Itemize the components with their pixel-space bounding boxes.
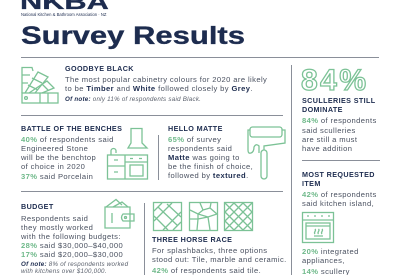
panel: sculleries: are still a must [302, 135, 357, 144]
heading: BUDGET [21, 202, 54, 211]
panel: budget [21, 198, 135, 275]
panel: battle of the benches [21, 124, 148, 181]
heading: MOST REQUESTED [302, 170, 375, 179]
panel: sculleries [301, 64, 377, 153]
body text: For splashbacks, three options [152, 246, 267, 255]
icon: paint roller [247, 126, 286, 180]
logo [20, 0, 109, 17]
heading: BATTLE OF THE BENCHES [21, 124, 122, 133]
icon: oven [302, 212, 334, 244]
icon: herringbone tile [152, 202, 182, 232]
panel: battle of the benches: will be the benchtop [21, 153, 96, 162]
panel: battle of the benches: Engineered Stone [21, 144, 88, 153]
icon: colour swatch fan [21, 66, 59, 104]
panel: hello matte: followed by textured. [168, 171, 249, 180]
panel: sculleries: have addition [302, 144, 352, 153]
body text: 65% of survey [168, 135, 221, 144]
panel: budget: they mostly worked [21, 223, 93, 232]
panel: most requested item: appliances, [302, 256, 345, 265]
note: Of note: 8% of respondents worked [21, 261, 128, 268]
body text: 20% integrated [302, 247, 359, 256]
panel: most requested item: said kitchen island, [302, 199, 374, 208]
panel: sculleries: DOMINATE [302, 105, 343, 114]
heading: GOODBYE BLACK [65, 64, 134, 73]
panel: hello matte: respondents said [168, 144, 232, 153]
icon: lattice tile [224, 202, 254, 232]
body text: The most popular cabinetry colours for 2020 are likely [65, 75, 267, 84]
panel: three horse race: 42% of respondents said tile. [152, 266, 261, 275]
heading: SCULLERIES STILL [302, 96, 376, 105]
panel: budget: with the following budgets: [21, 232, 121, 241]
heading: THREE HORSE RACE [152, 235, 232, 244]
panel: battle of the benches: 37% said Porcelain [21, 172, 93, 181]
body text: Respondents said [21, 214, 88, 223]
panel: goodbye black: to be Timber and White followed closely by Grey. [65, 84, 253, 93]
logo tagline: National Kitchen & Bathroom Association · NZ [21, 12, 106, 17]
panel: battle of the benches: of choice in 2020 [21, 162, 85, 171]
panel: budget: 28% said $30,000–$40,000 [21, 241, 123, 250]
panel: budget: with kitchens over $100,000. [21, 268, 107, 275]
body text: 40% of respondents said [21, 135, 114, 144]
panel: sculleries: said sculleries [302, 126, 356, 135]
panel: goodbye black [21, 64, 267, 104]
panel: three horse race: stood out: Tile, marble and ceramic. [152, 255, 287, 264]
body text: 84% of respondents [302, 116, 377, 125]
note: Of note: only 11% of respondents said Black. [65, 96, 201, 103]
panel: budget: 17% said $20,000–$30,000 [21, 250, 123, 259]
panel: most requested item [302, 170, 377, 275]
panel: most requested item: ITEM [302, 179, 321, 188]
panel: hello matte [168, 124, 286, 180]
heading: HELLO MATTE [168, 124, 223, 133]
title: Survey Results [21, 22, 245, 50]
panel: hello matte: Matte was going to [168, 153, 240, 162]
panel: three horse race [152, 202, 287, 275]
icon: kitchen [106, 128, 148, 180]
icon: wallet [104, 198, 135, 229]
panel: hello matte: be the finish of choice, [168, 162, 253, 171]
big number 84%: 84% [301, 64, 366, 97]
icon: marble tile [188, 202, 218, 232]
body text: 42% of respondents [302, 190, 377, 199]
